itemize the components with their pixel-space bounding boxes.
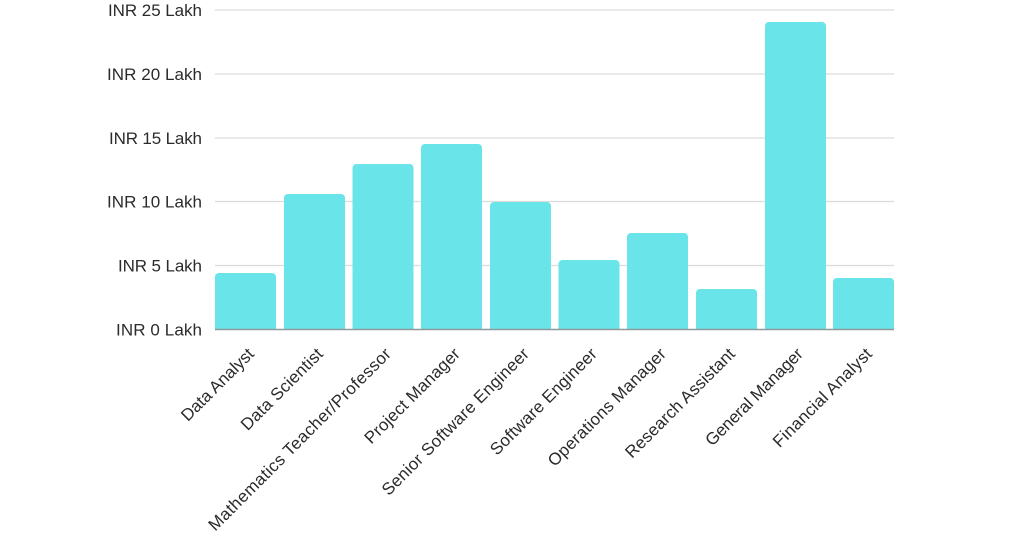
x-axis labels: Data Scientist xyxy=(237,344,327,434)
bars xyxy=(215,22,894,329)
y-axis labels: INR 15 Lakh xyxy=(109,129,202,148)
x-axis labels: Operations Manager xyxy=(544,344,670,470)
y-axis labels: INR 5 Lakh xyxy=(118,256,202,276)
x-axis labels: Financial Analyst xyxy=(769,344,876,451)
x-axis labels: General Manager xyxy=(701,344,807,450)
x-axis labels: Software Engineer xyxy=(486,344,601,459)
y-axis labels: INR 25 Lakh xyxy=(108,1,202,20)
y-axis labels: INR 20 Lakh xyxy=(107,65,202,84)
x-axis labels: Data Analyst xyxy=(177,344,258,425)
x-axis labels: Senior Software Engineer xyxy=(378,344,533,499)
x-axis labels: Research Assistant xyxy=(621,344,739,462)
x-axis labels xyxy=(177,344,876,535)
x-axis baseline xyxy=(215,328,894,330)
y-axis labels: INR 0 Lakh xyxy=(116,320,202,340)
y-axis labels: INR 10 Lakh xyxy=(107,192,202,212)
y-axis labels xyxy=(107,1,202,340)
x-axis labels: Project Manager xyxy=(361,344,464,448)
x-axis labels: Mathematics Teacher/Professor xyxy=(205,344,395,535)
